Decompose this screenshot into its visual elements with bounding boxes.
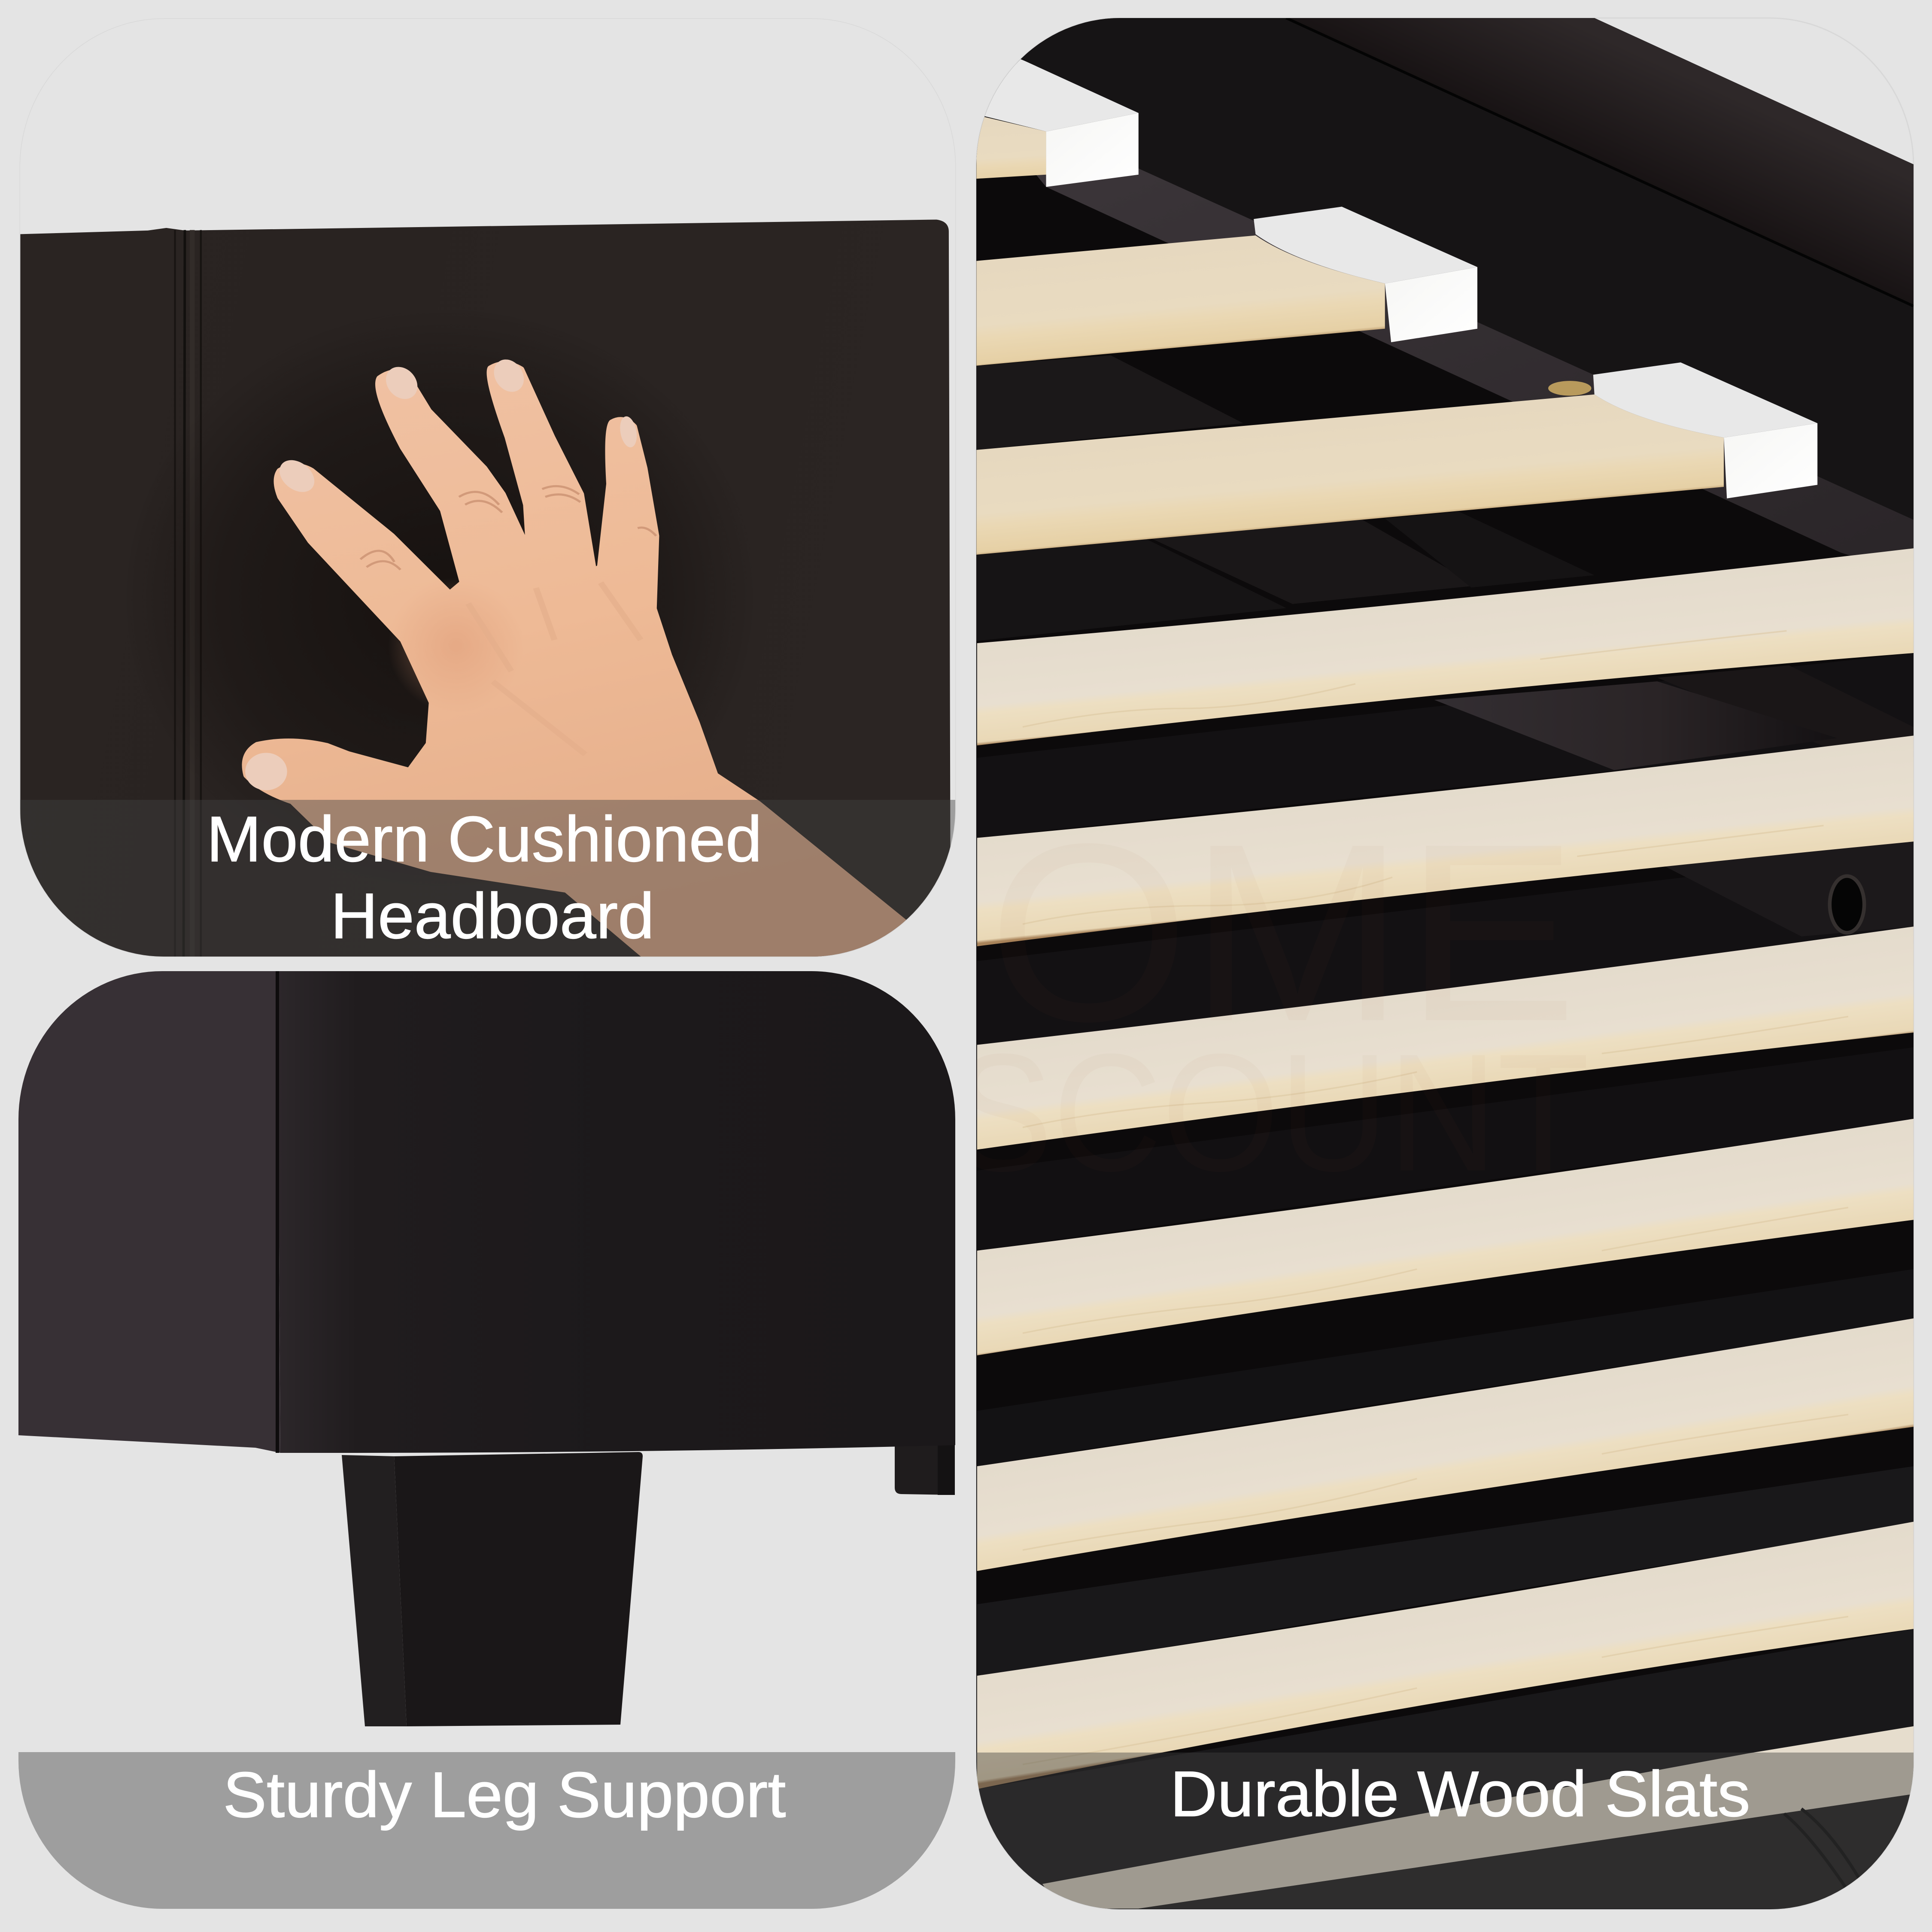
heading: Durable Wood Slats: Durable Wood Slats	[1170, 1758, 1750, 1830]
leather headboard rail	[1286, 18, 1914, 306]
lower slats and fabric	[977, 548, 1914, 1908]
white slat clip three	[1593, 362, 1817, 498]
panel: leg support	[18, 971, 955, 1909]
footboard seam	[1784, 1809, 1863, 1891]
front leg	[342, 1452, 643, 1726]
far leg shadow edge	[938, 1445, 955, 1495]
slat six	[977, 927, 1914, 1150]
slat eight	[977, 1318, 1914, 1571]
panel background	[20, 19, 955, 800]
slat nine	[977, 1522, 1914, 1789]
glossy rail reflection	[1434, 681, 1837, 770]
slat two	[976, 235, 1385, 366]
panel background	[18, 971, 955, 1909]
slat three	[976, 395, 1724, 555]
icon: hand pressing	[245, 356, 912, 963]
watermark line one: HOME	[801, 791, 1577, 1074]
fingernails	[245, 356, 639, 790]
leather footboard	[1139, 1794, 1914, 1908]
white slat clip one	[976, 41, 1139, 187]
slat five	[977, 735, 1914, 946]
upper frame detail	[976, 18, 1914, 641]
metal support rail	[1028, 164, 1914, 575]
wood grain marks	[1023, 631, 1848, 1765]
panel outline top left	[20, 19, 955, 957]
slat seven	[977, 1119, 1914, 1355]
dark rail below slat four	[1657, 665, 1914, 752]
bed frame side face	[18, 971, 280, 1453]
slat ten	[1042, 1726, 1914, 1908]
under-rail fabric pieces	[976, 355, 1243, 450]
heading line two: Headboard	[331, 880, 654, 952]
seam stitching	[175, 230, 201, 957]
headboard with seam and hand photo drawing	[20, 219, 951, 963]
caption band	[976, 1753, 1914, 1909]
hand silhouette	[246, 365, 912, 963]
side bracket	[1662, 841, 1914, 936]
far bed leg	[895, 1445, 955, 1495]
watermark: HOME DISCOUNT	[801, 791, 1589, 1206]
white slat clip two	[1254, 207, 1477, 342]
watermark line two: DISCOUNT	[801, 1019, 1589, 1206]
bed frame front face	[277, 971, 955, 1453]
leg front face	[394, 1452, 643, 1726]
knuckle shading	[388, 577, 524, 713]
bracket bolt	[1830, 876, 1864, 933]
dark bed interior	[976, 18, 1914, 1909]
caption band	[20, 800, 955, 957]
fabric side rail	[976, 18, 1914, 520]
leather rail lower edge	[1286, 18, 1914, 306]
panel: cushioned headboard	[20, 19, 955, 963]
slat four	[977, 548, 1914, 745]
panel: wood slats	[801, 18, 1914, 1909]
fabric below slats	[977, 653, 1914, 1908]
cushion press shadow	[123, 307, 764, 890]
heading: Sturdy Leg Support: Sturdy Leg Support	[223, 1759, 786, 1831]
bolt	[1548, 381, 1592, 396]
panel outline decoration top right	[976, 18, 1914, 1909]
headboard surface	[20, 219, 951, 963]
leg side face	[342, 1455, 407, 1726]
corner seam	[276, 971, 279, 1453]
heading: Modern Cushioned Headboard: Modern Cushioned	[207, 803, 762, 875]
caption band	[18, 1752, 955, 1909]
slat one	[976, 115, 1046, 179]
